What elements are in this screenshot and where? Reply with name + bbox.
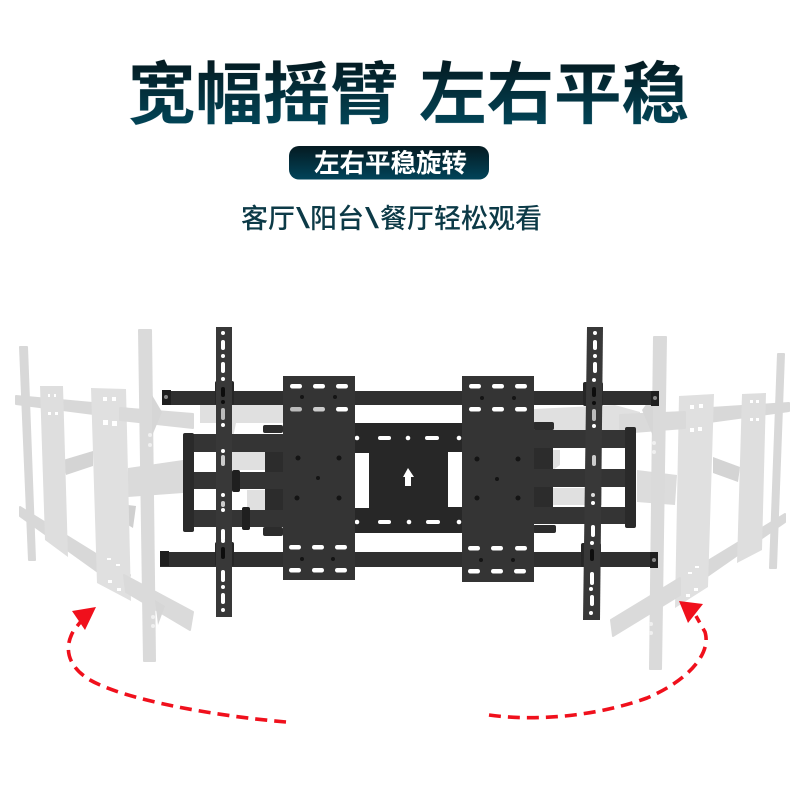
icon: up arrow	[403, 468, 414, 486]
right ghost bracket positions	[534, 337, 789, 669]
arms right	[533, 422, 636, 533]
arrow: right rotation	[489, 601, 706, 718]
description text: 阳台	[310, 204, 364, 234]
description text: 餐厅轻松观看	[380, 204, 542, 234]
left vertical rail	[215, 327, 234, 617]
centre plate	[355, 423, 462, 533]
left mounting plate	[283, 376, 355, 580]
title: 左右平稳	[419, 58, 689, 133]
centre black bracket	[160, 327, 659, 620]
subtitle pill: 左右平稳旋转	[314, 150, 467, 178]
description text: \	[365, 203, 381, 235]
description text	[241, 203, 542, 235]
horizontal bars	[160, 390, 659, 568]
arrow: left rotation	[68, 607, 286, 722]
description text: 客厅	[241, 204, 295, 234]
left ghost bracket positions	[16, 330, 283, 661]
arms left	[183, 425, 283, 536]
title	[128, 58, 689, 133]
right vertical rail	[581, 327, 603, 620]
title: 宽幅摇臂	[128, 58, 398, 133]
description text: \	[296, 203, 312, 235]
subtitle pill	[289, 146, 489, 180]
right mounting plate	[462, 376, 534, 582]
